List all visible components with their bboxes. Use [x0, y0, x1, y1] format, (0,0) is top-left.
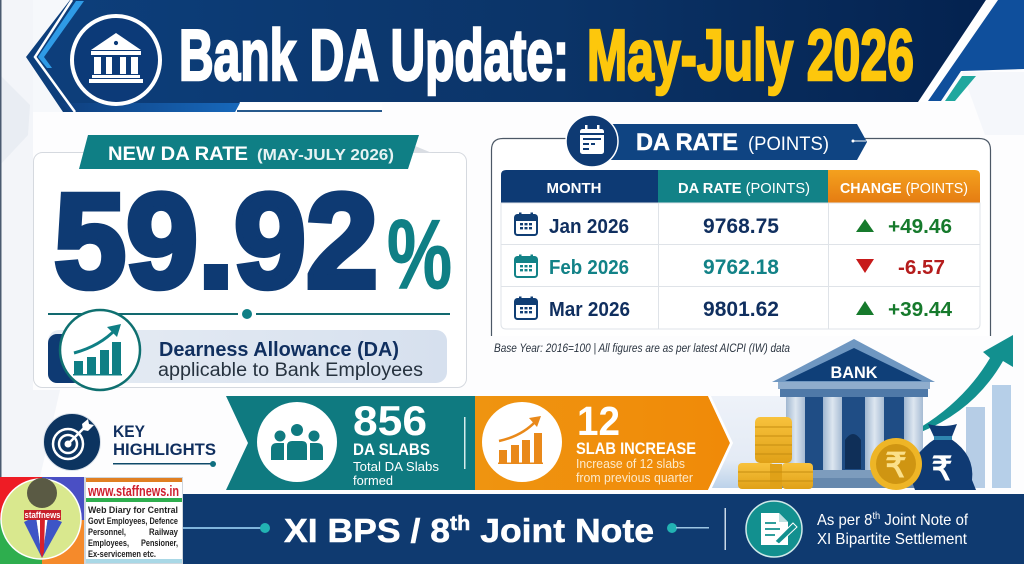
logo: staffnews: Web Diary for Central — [88, 505, 178, 516]
icon: document with pen — [746, 501, 802, 557]
logo: staffnews — [0, 477, 183, 564]
DA description pill: applicable to Bank Employees — [158, 360, 423, 381]
row: Mar 2026: +39.44 — [888, 298, 953, 321]
illustration backdrop — [708, 396, 788, 488]
row: Feb 2026: -6.57 — [898, 256, 945, 279]
panel: DA slabs: DA SLABS — [353, 440, 430, 459]
data table: DA RATE (POINTS) — [678, 180, 810, 197]
panel: slab increase: 12 — [577, 398, 620, 444]
row: Jan 2026: 9768.75 — [703, 215, 779, 238]
data table: MONTH — [546, 180, 602, 197]
data table — [501, 170, 980, 329]
heading: DA rate points: (POINTS) — [748, 133, 829, 155]
panel: DA slabs: 856 — [353, 397, 427, 444]
icon: bank in circle — [72, 16, 160, 104]
big percentage value: % — [387, 199, 452, 309]
key highlights label: KEY — [113, 422, 146, 441]
title: Bank DA Update: — [179, 16, 569, 96]
heading: DA rate points — [566, 115, 867, 167]
joint note caption: th — [872, 511, 880, 522]
key highlights label — [44, 414, 216, 470]
money bag: ₹ — [932, 450, 952, 487]
logo: staffnews: Pensioner, — [141, 538, 178, 549]
data table: CHANGE (POINTS) — [840, 180, 968, 197]
DA description pill: Dearness Allowance (DA) — [159, 338, 399, 361]
growth bars — [966, 385, 1011, 488]
arrow: growth — [921, 335, 1013, 432]
panel: DA slabs: Total DA Slabs — [353, 459, 440, 474]
row: Feb 2026: Feb 2026 — [549, 257, 629, 279]
bottom bar — [183, 494, 1024, 564]
logo: staffnews: Ex-servicemen etc. — [88, 549, 156, 560]
panel: slab increase: SLAB INCREASE — [576, 439, 696, 458]
panel: DA slabs — [226, 396, 476, 490]
row: Mar 2026: Mar 2026 — [549, 299, 630, 321]
key highlights label: HIGHLIGHTS — [113, 440, 216, 459]
panel: slab increase — [475, 396, 733, 490]
panel: slab increase: Increase of 12 slabs — [576, 456, 685, 471]
row: Feb 2026: 9762.18 — [703, 256, 779, 279]
joint note caption — [817, 511, 969, 548]
ribbon: new DA rate heading: NEW DA RATE — [108, 143, 248, 165]
joint note caption: XI Bipartite Settlement — [817, 531, 968, 548]
illustration: bank with coins and growth — [738, 335, 1013, 490]
row: Feb 2026 — [515, 254, 945, 279]
big percentage value: 59.92 — [54, 167, 378, 316]
panel: new DA rate — [34, 135, 466, 390]
logo: staffnews: Personnel, — [88, 527, 126, 538]
logo: staffnews: Employees, — [88, 538, 129, 549]
joint note caption: Joint Note of — [880, 512, 969, 529]
heading: DA rate points: DA RATE — [636, 129, 738, 156]
logo: staffnews: www.staffnews.in — [87, 484, 179, 500]
joint note caption: As per 8 — [817, 512, 877, 529]
row: Jan 2026: Jan 2026 — [549, 216, 629, 238]
ribbon: new DA rate heading: (MAY-JULY 2026) — [257, 147, 394, 164]
row: Mar 2026: 9801.62 — [703, 298, 779, 321]
gold coin stacks — [738, 417, 813, 489]
rupee coin: ₹ — [885, 447, 907, 485]
logo: staffnews: Govt Employees, Defence — [88, 516, 178, 527]
joint note heading: th — [450, 513, 470, 535]
panel: DA slabs: formed — [353, 473, 393, 488]
header banner — [26, 0, 1024, 112]
logo: staffnews: Railway — [149, 527, 179, 538]
row: Jan 2026 — [515, 212, 952, 238]
DA description pill — [48, 310, 447, 390]
row: Jan 2026: +49.46 — [888, 215, 952, 238]
logo: staffnews: staffnews — [24, 510, 60, 521]
bank building — [772, 339, 935, 488]
rupee coin — [870, 438, 922, 490]
note: base year: Base Year: 2016=100 | All figures are as per latest AICPI (IW) data — [494, 343, 790, 355]
bank building: BANK — [830, 364, 878, 382]
ribbon: new DA rate heading — [79, 135, 419, 169]
row: Mar 2026 — [515, 296, 953, 321]
joint note heading: XI BPS / 8 — [284, 512, 438, 549]
panel: DA rate points — [492, 115, 990, 336]
joint note heading: Joint Note — [470, 512, 654, 549]
money bag — [911, 424, 976, 490]
panel: slab increase: from previous quarter — [576, 470, 694, 485]
